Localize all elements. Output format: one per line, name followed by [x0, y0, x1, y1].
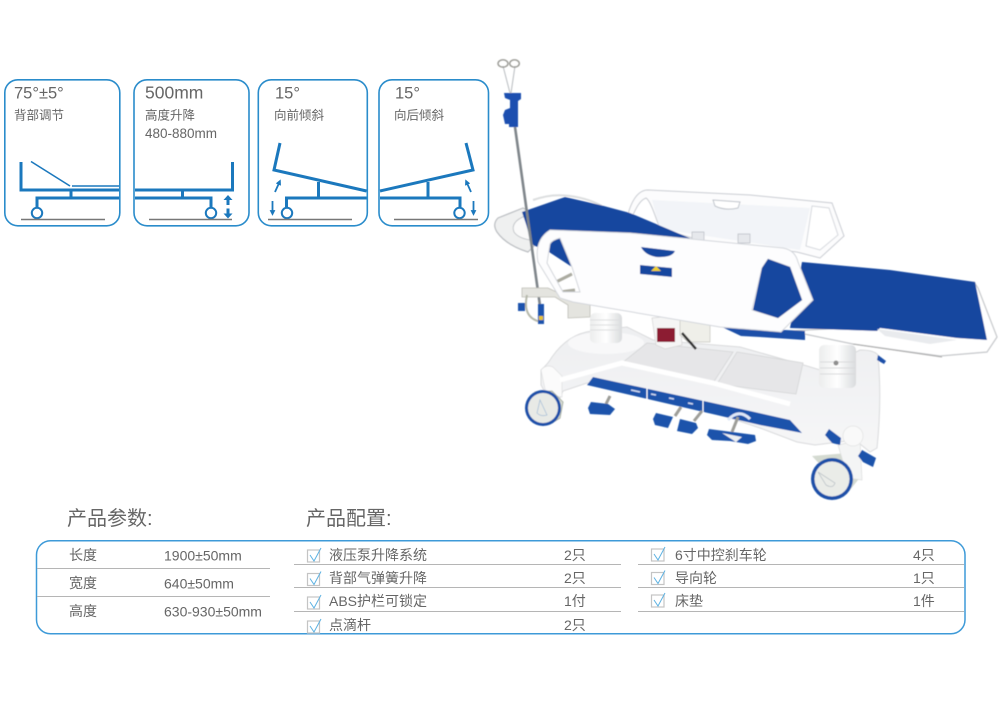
icon: bed with height arrows [135, 162, 232, 220]
row: height [69, 603, 262, 620]
row: length [69, 547, 242, 564]
row: length: 1900±50mm [164, 548, 242, 564]
far side rail [628, 190, 844, 258]
item: ABS rail [308, 593, 586, 609]
heading: product parameters: 产品参数: [67, 507, 153, 530]
heading: 15° backward: 15° [395, 84, 420, 102]
panel: back adjustment card [5, 80, 120, 226]
item: central brake caster: 6寸中控刹车轮 [675, 547, 767, 563]
foot pedals [588, 396, 756, 444]
panel: specification table [36, 541, 965, 634]
heading: 75°±5°: 75°±5° [14, 84, 64, 102]
rail label badge [640, 265, 672, 277]
head tray ring [495, 195, 602, 252]
heading: 500mm: 500mm [145, 82, 203, 102]
row: height: 630-930±50mm [164, 604, 262, 620]
row: width [69, 575, 234, 592]
configuration list left [294, 547, 621, 633]
control box and brake lever [652, 315, 805, 349]
item: gas spring: 2只 [564, 570, 586, 586]
item: gas spring: 背部气弹簧升降 [329, 570, 427, 586]
item: iv pole [308, 617, 586, 633]
item: mattress: 床垫 [675, 593, 703, 609]
icon: bed tilted forward [268, 143, 366, 220]
item: guide wheel: 导向轮 [675, 570, 717, 586]
item: ABS rail: 1付 [564, 593, 586, 609]
mattress: head section [522, 197, 694, 267]
item: central brake caster: 4只 [913, 547, 935, 563]
heading: product configuration: 产品配置: [306, 507, 392, 530]
iv pole [498, 60, 542, 320]
label: 480-880mm: 480-880mm [145, 126, 217, 141]
row: width: 宽度 [69, 575, 97, 591]
item: iv pole: 点滴杆 [329, 617, 371, 633]
panel: height adjustment card [134, 80, 249, 226]
near side rail [537, 230, 813, 332]
label: height range: 高度升降 [145, 108, 196, 122]
item: hydraulic pump [308, 547, 586, 563]
row: length: 长度 [69, 547, 97, 563]
parameters list [37, 547, 270, 620]
item: ABS rail: ABS护栏可锁定 [329, 593, 427, 609]
mattress: foot section [790, 262, 997, 357]
item: guide wheel [652, 570, 935, 586]
configuration list right [638, 547, 964, 612]
item: iv pole: 2只 [564, 617, 586, 633]
item: hydraulic pump: 液压泵升降系统 [329, 547, 427, 563]
product photo: hospital stretcher [495, 60, 997, 500]
label: back adjustment: 背部调节 [14, 108, 64, 122]
base body [541, 327, 880, 452]
row: height: 高度 [69, 603, 97, 619]
row: width: 640±50mm [164, 576, 234, 592]
heading: 15° forward: 15° [275, 84, 300, 102]
item: mattress: 1件 [913, 593, 935, 609]
item: mattress [652, 593, 935, 609]
item: gas spring [308, 570, 586, 586]
icon: bed with raised back [21, 162, 119, 220]
item: central brake caster [652, 547, 935, 563]
panel: forward tilt card [258, 80, 367, 226]
hydraulic columns [590, 313, 856, 388]
item: hydraulic pump: 2只 [564, 547, 586, 563]
label: backward tilt: 向后倾斜 [394, 108, 445, 122]
panel: backward tilt card [379, 80, 488, 226]
item: guide wheel: 1只 [913, 570, 935, 586]
blue control strip [587, 377, 802, 433]
label: forward tilt: 向前倾斜 [274, 108, 325, 122]
left caster wheel [525, 390, 563, 426]
base under-frame and brackets [518, 274, 590, 324]
right caster wheel and brake [811, 355, 886, 500]
icon: bed tilted backward [380, 143, 478, 220]
